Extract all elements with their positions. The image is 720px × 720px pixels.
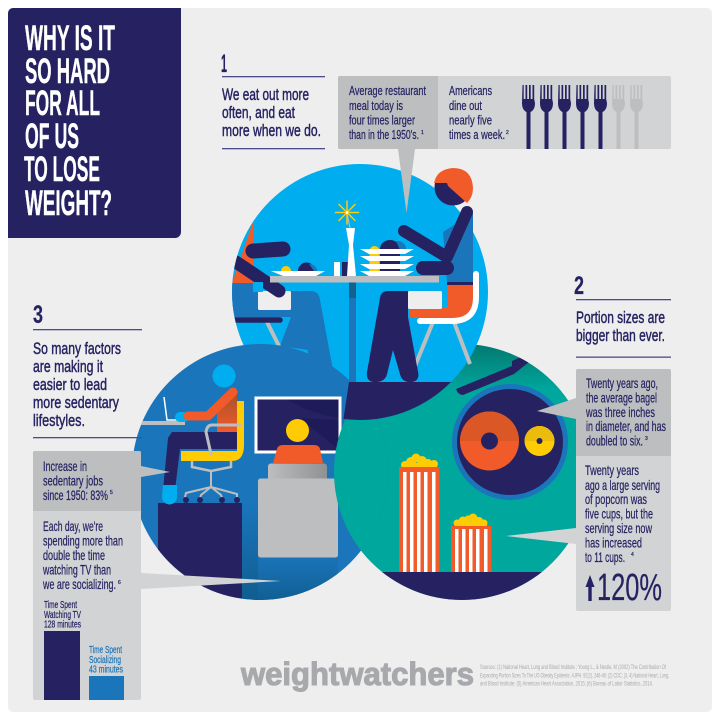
panel: portion facts: to 11 cups. [585,549,625,565]
teal circle: portion sizes base [334,344,590,600]
section 1 heading: 1 [221,50,227,78]
panel: portion facts: 4 [631,552,634,558]
desk worker [137,364,258,603]
title panel: OF US [25,117,79,156]
section 2 heading [574,272,671,358]
section 1 heading: more when we do. [222,121,321,140]
navy floor of top circle [344,382,451,420]
panel: portion facts [506,369,671,611]
section 3 heading: are making it [33,357,103,376]
panel: sedentary facts: 5 [110,490,113,496]
panel: portion facts: 3 [645,436,648,442]
section 3 heading: So many factors [33,339,121,358]
section 1 heading [221,50,325,149]
panel: portion facts: Twenty years ago, [586,375,658,391]
section 3 heading: more sedentary [33,393,119,412]
panel: restaurant facts: four times larger [349,112,415,128]
section 3 heading [33,301,142,438]
panel: restaurant facts: 1 [421,130,424,136]
teal over left circle overlap [334,419,388,550]
panel: restaurant facts: times a week. [449,127,505,142]
title panel [8,8,181,238]
logo: weightwatchers: weightwatchers [240,656,474,692]
panel: portion facts: Twenty years [585,462,639,478]
bar chart: TV vs socializing [44,600,124,700]
panel: portion facts: serving size now [585,520,653,536]
panel: sedentary facts: double the time [43,547,105,563]
panel: portion facts: doubled to six. [586,432,643,448]
panel: portion facts: was three inches [585,404,655,420]
section 1 heading: We eat out more [222,85,309,104]
panel: restaurant facts: dine out [449,98,482,113]
redrawn feet of right diner resting on floor [367,366,418,382]
section 3 heading: 3 [33,301,43,329]
bar chart: TV vs socializing: Watching TV [44,610,81,621]
sources [480,664,669,688]
title panel: FOR ALL [25,84,100,123]
panel: restaurant facts: meal today is [349,98,403,113]
panel: portion facts: five cups, but the [585,506,653,522]
panel: sedentary facts: since 1950: 83% [43,487,108,503]
icon: up arrow [586,575,594,601]
bar chart: TV vs socializing: Socializing [89,655,121,666]
popcorn boxes [399,454,492,572]
panel: sedentary facts [33,451,281,700]
section 3 heading: easier to lead [33,375,107,394]
panel: sedentary facts: Increase in [43,458,87,474]
title panel: SO HARD [25,52,110,91]
panel: sedentary facts: 6 [118,580,121,586]
left circle: sedentary scene [132,344,388,605]
panel: restaurant facts [338,76,671,213]
panel: sedentary facts: we are socializing. [42,576,116,592]
panel: sedentary facts: Each day, we're [43,518,103,534]
TV viewer [256,398,340,605]
panel: sedentary facts: watching TV than [42,562,111,578]
panel: restaurant facts: 2 [506,130,509,136]
panel: portion facts: has increased [585,534,642,550]
panel: restaurant facts: Average restaurant [349,83,426,98]
left diner [232,222,333,370]
plate with bagels and knife [382,358,568,600]
section 2 heading: Portion sizes are [576,308,665,327]
top circle: restaurant scene [232,164,488,420]
section 2 heading: 2 [574,272,584,300]
title panel: WEIGHT? [25,184,112,223]
panel: sedentary facts: sedentary jobs [43,472,103,488]
statistic: 120%: 120% [597,567,662,609]
panel: restaurant facts: Americans [449,83,492,98]
section 1 heading: often, and eat [222,103,295,122]
right diner [367,168,476,382]
panel: restaurant facts: than in the 1950's. [349,127,419,142]
section 2 heading: bigger than ever. [576,326,665,345]
bar chart: TV vs socializing: Time Spent [44,600,77,611]
title panel: WHY IS IT [25,19,115,58]
bar chart: TV vs socializing: Time Spent [89,645,122,656]
title panel: TO LOSE [24,150,100,189]
panel: sedentary facts: spending more than [43,532,123,548]
bar chart: TV vs socializing: 128 minutes [44,620,81,630]
section 3 heading: lifestyles. [33,411,85,430]
icon: forks showing five of seven [522,85,643,149]
panel: restaurant facts: nearly five [449,112,492,128]
panel: portion facts: in diameter, and has [586,418,666,434]
table with flower, plates [253,201,447,382]
bar chart: TV vs socializing: 43 minutes [89,664,123,676]
panel: portion facts: of popcorn was [585,491,647,507]
panel: portion facts: the average bagel [586,390,657,406]
panel: portion facts: ago a large serving [585,477,660,493]
